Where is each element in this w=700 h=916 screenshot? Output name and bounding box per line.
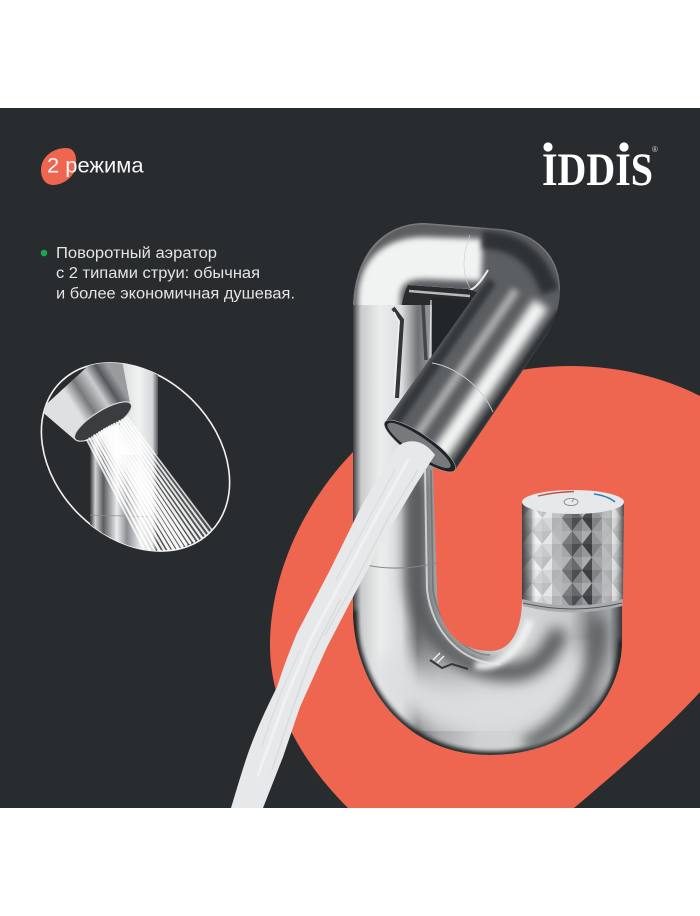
registered mark: ® xyxy=(652,145,658,154)
knob faceted side xyxy=(522,503,624,606)
knob dark facets xyxy=(552,510,612,606)
J body shading xyxy=(353,470,622,755)
description text: и более экономичная душевая. xyxy=(56,286,295,302)
water stream xyxy=(231,441,435,808)
dark head shading xyxy=(482,240,550,292)
nozzle face xyxy=(387,422,451,468)
logo wordmark: IDDIS xyxy=(542,144,653,196)
inset upper tube xyxy=(120,355,158,455)
arch under-ridge xyxy=(409,291,470,296)
nozzle rim xyxy=(384,420,456,472)
nozzle stripe: outer dark xyxy=(453,311,560,468)
green bullet xyxy=(41,250,47,256)
water body xyxy=(231,441,435,808)
rotating nozzle xyxy=(385,270,560,470)
inset: shower jet close-up xyxy=(40,362,230,552)
logo dot right xyxy=(619,142,629,152)
heading blob xyxy=(41,148,76,185)
coral blob behind faucet xyxy=(270,366,700,808)
nozzle end xyxy=(384,420,456,472)
arch seam xyxy=(464,235,470,288)
logo: IDDIS xyxy=(542,142,658,196)
J body base xyxy=(353,305,622,755)
inset ring xyxy=(4,325,267,589)
knob lower ring xyxy=(522,599,623,612)
water texture xyxy=(258,460,418,775)
inset nozzle rim xyxy=(74,401,132,442)
dark opening inside the arch xyxy=(432,297,472,357)
inner spout reflection xyxy=(393,300,431,398)
red mark xyxy=(538,492,574,496)
nozzle stripe: grey xyxy=(413,290,516,441)
inset spray lines xyxy=(87,417,214,560)
faucet xyxy=(231,215,624,808)
description text: с 2 типами струи: обычная xyxy=(56,265,260,282)
blue mark xyxy=(594,494,615,502)
top rim xyxy=(353,223,560,305)
power icon xyxy=(564,498,578,506)
bullet description xyxy=(41,245,295,302)
heading: 2 режима xyxy=(41,148,144,185)
nozzle base tone xyxy=(386,300,523,468)
panel: dark background xyxy=(0,108,700,808)
description text: Поворотный аэратор xyxy=(56,245,217,262)
nozzle stripe: inner dark xyxy=(392,281,492,427)
faucet J-shaped body xyxy=(353,305,622,755)
inset contents xyxy=(44,362,212,551)
knob side shading xyxy=(522,503,624,606)
heading text: 2 режима xyxy=(47,154,144,178)
logo dot left xyxy=(543,142,553,152)
knob top xyxy=(522,490,624,514)
description text xyxy=(56,245,295,302)
inset tube seam xyxy=(90,515,157,517)
white core of arch xyxy=(379,258,482,335)
arch lower reflection xyxy=(408,270,488,290)
nozzle seam xyxy=(432,363,493,412)
knob xyxy=(522,490,624,615)
inset tube xyxy=(90,425,157,560)
inset spray haze xyxy=(88,422,211,551)
knob ring groove xyxy=(523,603,622,609)
faucet arch xyxy=(353,223,560,469)
nozzle stripe: bright xyxy=(437,304,541,458)
arch base tone xyxy=(353,223,560,469)
inset nozzle xyxy=(44,362,130,440)
